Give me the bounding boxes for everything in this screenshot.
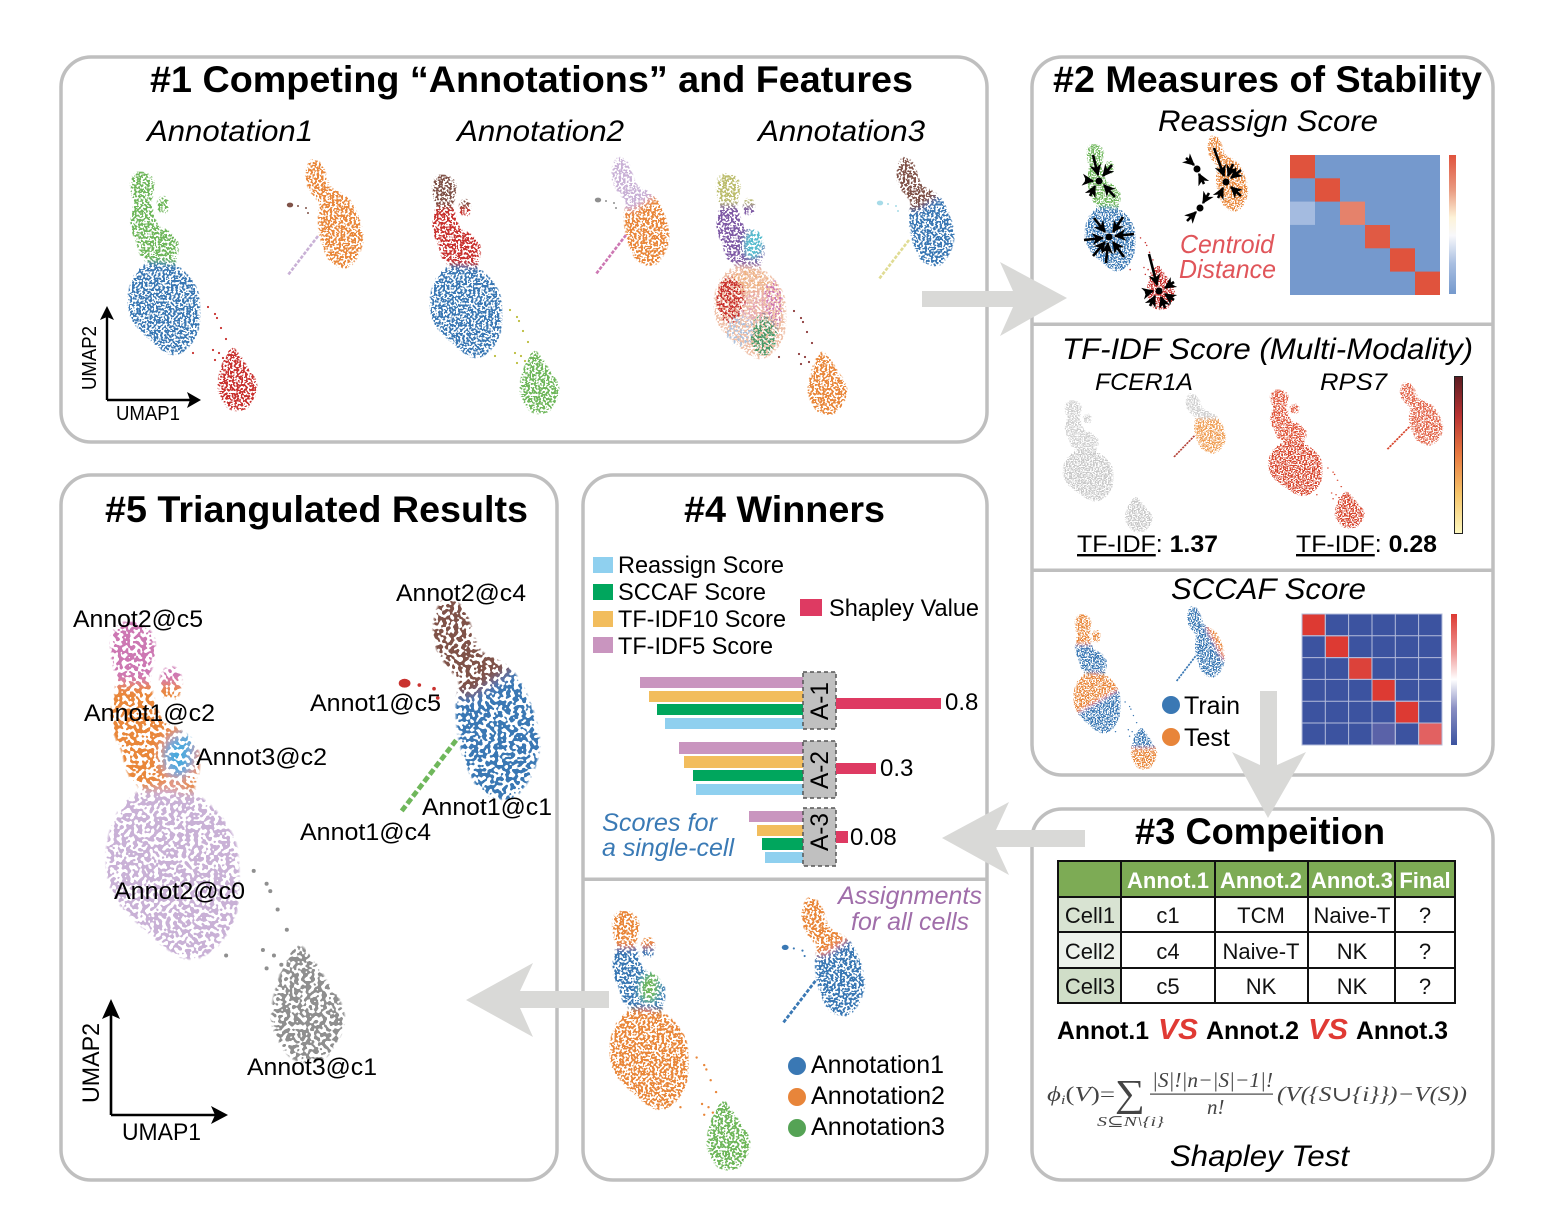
table: annotation comparison: Annot.3 (1311, 868, 1393, 893)
scatter plot: triangulated clusters (109, 600, 537, 1059)
text: Annot.1 VS Annot.2 VS Annot.3: VS (1308, 1014, 1349, 1046)
legend: score types: Reassign Score (618, 552, 784, 579)
table: annotation comparison: NK (1337, 974, 1368, 999)
scatter plot: winning assignments (612, 899, 863, 1168)
table: annotation comparison: Cell3 (1065, 974, 1115, 999)
table: annotation comparison: c4 (1156, 939, 1180, 964)
heading: TF-IDF Score: TF-IDF Score (Multi-Modality) (1062, 333, 1473, 366)
table: annotation comparison: c1 (1156, 903, 1180, 928)
arrow: panel 2 to panel 3 (1232, 691, 1306, 818)
arrow: panel 3 to panel 4 (942, 802, 1085, 875)
label: Annotation1: Annotation1 (145, 115, 313, 148)
callout: assignments for all cells: Assignments (836, 882, 982, 910)
text: Annot.1 VS Annot.2 VS Annot.3: Annot.1 (1057, 1017, 1149, 1045)
scatter plot: FCER1A expression (1064, 394, 1225, 531)
labels: cluster names: Annot1@c4 (300, 819, 431, 846)
bar group: A-2 (679, 741, 913, 798)
legend: score types (593, 552, 786, 660)
legend: annotations: Annotation3 (811, 1113, 945, 1141)
scatter plot: reassign clusters (1086, 136, 1247, 309)
legend: score types: SCCAF Score (618, 579, 766, 606)
heading: panel 3 title: #3 Compeition (1135, 811, 1385, 852)
labels: cluster names: Annot1@c2 (84, 700, 215, 727)
table: annotation comparison: ? (1419, 974, 1431, 999)
label: Annotation3: Annotation3 (756, 115, 925, 148)
arrow: panel 4 to panel 5 (466, 963, 609, 1037)
bar group: A-1 (640, 672, 978, 729)
label: RPS7: RPS7 (1320, 369, 1389, 396)
heading: Reassign Score: Reassign Score (1158, 105, 1378, 138)
labels: cluster names: Annot3@c2 (196, 744, 327, 771)
panel: #3 Competition (1032, 809, 1493, 1180)
labels: cluster names: Annot3@c1 (247, 1054, 377, 1081)
axes: UMAP arrows panel 1: UMAP2 (79, 326, 101, 390)
legend: annotations (788, 1051, 945, 1141)
callout: assignments for all cells: for all cells (851, 908, 969, 936)
scatter plot: train/test split (1075, 607, 1224, 768)
heatmap: reassign score (1290, 155, 1440, 295)
label: TF-IDF 0.28: TF-IDF: 0.28 (1296, 531, 1437, 558)
legend: annotations: Annotation1 (811, 1051, 944, 1079)
legend: score types: TF-IDF10 Score (618, 606, 786, 633)
formula: Shapley value: i (1061, 1092, 1066, 1107)
colorbar: TF-IDF expression (1454, 376, 1462, 534)
legend: Train and Test (1162, 692, 1240, 752)
callout: scores for a single-cell: Scores for (602, 809, 719, 837)
formula: Shapley value: n! (1207, 1095, 1224, 1119)
table: annotation comparison: Cell1 (1065, 903, 1115, 928)
labels: cluster names: Annot1@c1 (422, 794, 552, 821)
axes: UMAP arrows panel 5 (78, 999, 228, 1146)
labels: cluster names: Annot2@c5 (73, 606, 203, 633)
labels: cluster names: Annot2@c4 (396, 580, 526, 607)
text: Annot.1 VS Annot.2 VS Annot.3 (1057, 1014, 1448, 1046)
axes: UMAP arrows panel 1 (79, 306, 201, 425)
labels: cluster names: Annot1@c5 (310, 690, 441, 717)
table: annotation comparison: Annot.2 (1220, 868, 1302, 893)
formula: Shapley value: S⊆N\{i} (1097, 1115, 1165, 1130)
label: Centroid Distance: Centroid (1180, 229, 1275, 259)
scatter plot: Annotation2 clusters (431, 158, 668, 412)
text: Annot.1 VS Annot.2 VS Annot.3: Annot.3 (1356, 1017, 1448, 1045)
legend: annotations: Annotation2 (811, 1082, 945, 1110)
table: annotation comparison: Final (1399, 868, 1451, 893)
table: annotation comparison: Naive-T (1313, 903, 1391, 928)
axes: UMAP arrows panel 1: UMAP1 (116, 403, 180, 425)
callout: scores for a single-cell (602, 809, 735, 862)
table: annotation comparison: Cell2 (1065, 939, 1115, 964)
heading: SCCAF Score: SCCAF Score (1171, 573, 1366, 606)
bar group: A-3 (749, 808, 897, 866)
colorbar: reassign heatmap (1449, 155, 1456, 294)
formula: Shapley value: ∑ (1115, 1073, 1145, 1115)
panel: #2 Measures of stability (1032, 57, 1493, 775)
axes: UMAP arrows panel 5: UMAP1 (122, 1119, 201, 1146)
panel: #5 Triangulated results (61, 475, 557, 1180)
bar group: A-2: 0.3 (880, 755, 913, 782)
heading: panel 4 title: #4 Winners (684, 489, 885, 530)
formula: Shapley value: (V({S∪{i}})−V(S)) (1277, 1082, 1467, 1106)
formula: Shapley value: ϕ (1047, 1082, 1058, 1106)
table: annotation comparison: ? (1419, 903, 1431, 928)
table: annotation comparison (1058, 861, 1455, 1003)
label: TF-IDF 1.37: TF-IDF: 1.37 (1077, 531, 1218, 558)
formula: Shapley value (1047, 1068, 1467, 1130)
legend: score types: TF-IDF5 Score (618, 633, 773, 660)
table: annotation comparison: NK (1246, 974, 1277, 999)
label: Annotation2: Annotation2 (455, 115, 624, 148)
heading: panel 2 title: #2 Measures of Stability (1053, 59, 1482, 100)
formula: Shapley value: |S|!|n−|S|−1|! (1152, 1068, 1273, 1092)
bar group: A-3: 0.08 (850, 824, 897, 851)
labels: cluster names: Annot2@c0 (114, 878, 245, 905)
callout: scores for a single-cell: a single-cell (602, 834, 735, 862)
table: annotation comparison: NK (1337, 939, 1368, 964)
bar group: A-1: 0.8 (945, 689, 978, 716)
legend: Train and Test: Train (1184, 692, 1240, 720)
heading: panel 5 title: #5 Triangulated Results (105, 489, 528, 530)
label: Shapley Test: Shapley Test (1170, 1140, 1351, 1173)
table: annotation comparison: c5 (1156, 974, 1180, 999)
label: FCER1A: FCER1A (1095, 369, 1193, 396)
text: Annot.1 VS Annot.2 VS Annot.3: VS (1158, 1014, 1199, 1046)
bar group: A-2: A-2 (806, 751, 834, 789)
formula: Shapley value: V)= (1074, 1082, 1110, 1106)
label: Centroid Distance: Distance (1179, 254, 1276, 284)
colorbar: SCCAF heatmap (1451, 614, 1457, 745)
callout: assignments for all cells (836, 882, 982, 936)
heading: panel 1 title: #1 Competing “Annotations” and Features (150, 59, 913, 100)
arrows: centroid distance arrows (1084, 148, 1241, 308)
text: Annot.1 VS Annot.2 VS Annot.3: Annot.2 (1206, 1017, 1299, 1045)
panel: #1 Competing annotations and features (61, 57, 987, 442)
panel: #4 Winners (583, 475, 987, 1180)
labels: cluster names (73, 580, 552, 1081)
table: annotation comparison: TCM (1237, 903, 1285, 928)
scatter plot: Annotation3 clusters (715, 158, 953, 414)
label: Centroid Distance (1179, 229, 1276, 284)
bar group: A-1: A-1 (806, 682, 834, 720)
legend: Shapley Value: Shapley Value (829, 595, 979, 622)
legend: Train and Test: Test (1184, 724, 1230, 752)
scatter plot: RPS7 expression (1270, 383, 1442, 528)
table: annotation comparison: Naive-T (1222, 939, 1300, 964)
scatter plot: Annotation1 clusters (129, 160, 362, 410)
arrow: panel 1 to panel 2 (922, 262, 1067, 336)
axes: UMAP arrows panel 5: UMAP2 (78, 1023, 105, 1103)
bar group: A-3: A-3 (806, 813, 834, 851)
table: annotation comparison: Annot.1 (1127, 868, 1209, 893)
formula: Shapley value: ( (1066, 1082, 1074, 1106)
heatmap: SCCAF confusion matrix (1302, 614, 1442, 745)
table: annotation comparison: ? (1419, 939, 1431, 964)
